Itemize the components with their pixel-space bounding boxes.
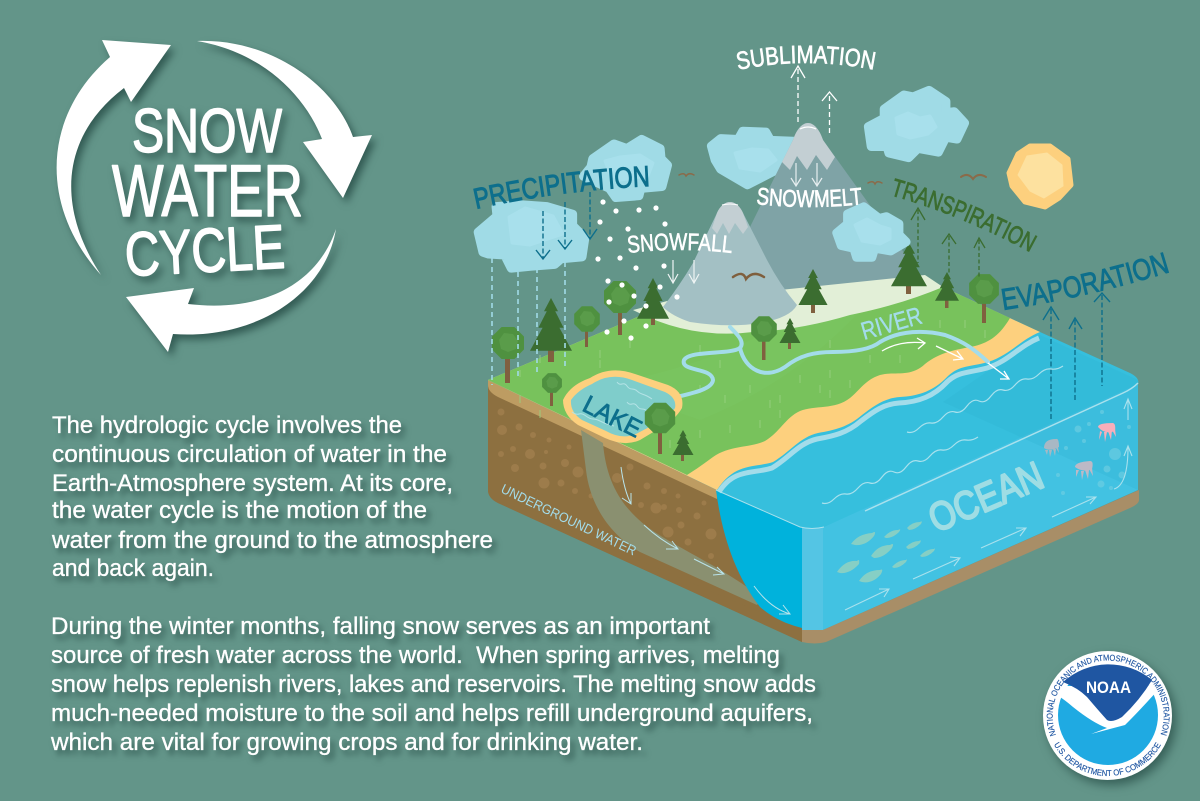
- recycling arrows logo: [57, 40, 372, 352]
- label: underground water: UNDERGROUND WATER: [499, 481, 639, 559]
- underground flow arrows: [621, 467, 790, 614]
- arrows: snowfall: [668, 260, 699, 283]
- paragraph: hydrologic cycle: Earth-Atmosphere system. At its core,: [52, 470, 453, 497]
- paragraph: hydrologic cycle: The hydrologic cycle involves the: [52, 412, 402, 439]
- cloud mid left: [584, 139, 667, 197]
- paragraph: hydrologic cycle: water from the ground to the atmosphere: [51, 527, 493, 554]
- label: lake: LAKE: [578, 390, 646, 443]
- underground water stream: [581, 430, 762, 605]
- title: snow water cycle: SNOW: [132, 97, 282, 166]
- sun: [1009, 146, 1071, 207]
- back mountain: [690, 123, 925, 335]
- title: snow water cycle: [112, 97, 303, 290]
- arrows: snowmelt: [791, 163, 822, 186]
- ocean current arrows: [845, 399, 1132, 610]
- cloud front of mountain: [837, 207, 906, 257]
- cloud left: [478, 205, 585, 268]
- label: snowmelt: SNOWMELT: [756, 187, 862, 208]
- block: ocean front face: [488, 383, 1139, 644]
- block: soil left face: [488, 380, 802, 642]
- paragraph: winter snow: [50, 613, 816, 756]
- grass ticks: [520, 320, 985, 448]
- paragraph: hydrologic cycle: [51, 412, 493, 582]
- rain dashed lines: [492, 258, 565, 385]
- birds: [679, 174, 986, 279]
- jellyfish: [1044, 423, 1116, 480]
- label: precipitation: PRECIPITATION: [473, 166, 649, 210]
- paragraph: winter snow: which are vital for growing crops and for drinking water.: [50, 729, 643, 756]
- trees on land: [493, 243, 998, 461]
- cloud upper right: [869, 91, 964, 157]
- paragraph: winter snow: snow helps replenish rivers, lakes and reservoirs. The melting snow adds: [51, 671, 816, 698]
- NOAA logo: U.S. DEPARTMENT OF COMMERCE: [1054, 742, 1161, 776]
- river: [652, 327, 988, 403]
- paragraph: winter snow: source of fresh water across the world. When spring arrives, melting: [51, 642, 780, 669]
- snowflake dots: [595, 199, 680, 341]
- paragraph: hydrologic cycle: the water cycle is the motion of the: [52, 497, 427, 524]
- cloud behind mountain: [712, 131, 796, 185]
- arrows: evaporation: [1043, 293, 1110, 419]
- block: water cross-section: [716, 490, 802, 628]
- beige snowline band and front mountain: [633, 202, 943, 334]
- arrows: river flow: [882, 338, 1009, 379]
- paragraph: winter snow: During the winter months, falling snow serves as an important: [51, 613, 710, 640]
- NOAA logo: NOAA: [1086, 679, 1131, 697]
- label: river: RIVER: [858, 302, 925, 346]
- label: transpiration: TRANSPIRATION: [894, 178, 1038, 252]
- lake: [563, 370, 682, 443]
- title: snow water cycle: WATER: [112, 151, 303, 232]
- arrows: sublimation: [791, 66, 837, 133]
- title: snow water cycle: CYCLE: [123, 213, 287, 290]
- paragraph: winter snow: much-needed moisture to the soil and helps refill underground aquifers,: [51, 700, 813, 727]
- ocean surface waves: [716, 366, 1138, 528]
- fish school: [837, 521, 935, 582]
- paragraph: hydrologic cycle: continuous circulation of water in the: [52, 441, 447, 468]
- arrows: precipitation: [536, 192, 597, 259]
- label: ocean: OCEAN: [922, 454, 1050, 541]
- label: snowfall: SNOWFALL: [628, 233, 732, 254]
- label: sublimation: SUBLIMATION: [736, 45, 876, 70]
- NOAA logo: [1042, 651, 1181, 790]
- label: evaporation: EVAPORATION: [1001, 252, 1170, 310]
- bubbles: [1056, 410, 1131, 495]
- arrows: transpiration: [911, 208, 985, 277]
- block: land and shore top: [488, 287, 1138, 528]
- NOAA logo: NATIONAL OCEANIC AND ATMOSPHERIC ADMINISTRATION: [1046, 654, 1170, 736]
- paragraph: hydrologic cycle: and back again.: [52, 555, 214, 582]
